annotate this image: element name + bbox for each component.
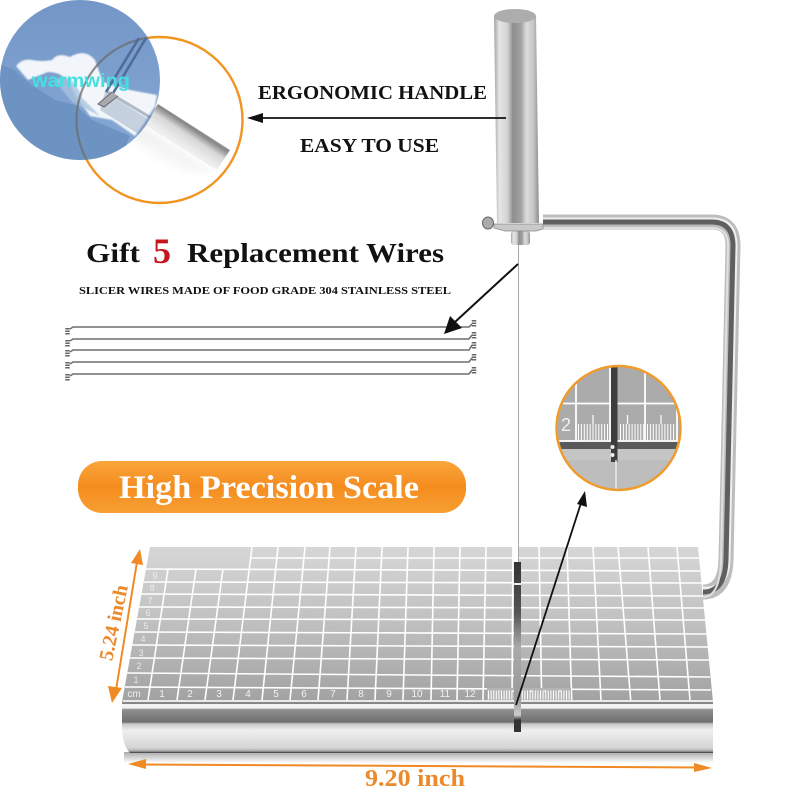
horizontal scale numbers: 6 [301,689,307,700]
text: easy to use: EASY TO USE [300,135,439,157]
horizontal scale numbers: 9 [386,689,392,700]
zoom circle: handle detail [76,37,242,203]
arrow: to handle [247,113,506,123]
horizontal scale numbers: 8 [358,689,364,700]
heading: gift replacement wires [86,231,444,271]
watermark text: warmwing [31,71,130,92]
heading: gift replacement wires: 5 [153,231,171,271]
vertical scale numbers: 5 [143,621,149,631]
horizontal scale numbers: 4 [245,689,251,700]
horizontal scale numbers: cm [127,689,141,700]
heading: gift replacement wires: Gift [86,238,140,268]
vertical scale numbers: 1 [133,675,139,685]
ruler ticks [487,688,571,700]
heading: ergonomic handle: ERGONOMIC HANDLE [258,82,487,104]
pill banner: high precision scale: High Precision Scale [119,470,419,506]
replacement wires [68,320,474,381]
board shadow [124,752,713,763]
heading: gift replacement wires: Replacement Wires [187,238,444,268]
vertical scale numbers: 9 [152,571,158,581]
board slot [512,530,521,732]
vertical scale numbers: 6 [145,608,151,618]
horizontal scale numbers: 1 [159,689,165,700]
horizontal scale numbers: 10 [411,689,423,700]
horizontal scale numbers: 5 [273,689,279,700]
arrow: to scale detail [516,491,587,705]
watermark: sky circle [0,0,160,160]
horizontal scale numbers: 3 [216,689,222,700]
collar and screw [482,217,543,245]
slicer frame arm [543,219,736,597]
horizontal scale numbers: 2 [187,689,193,700]
dimension label: 9.20 inch: 9.20 inch [365,766,465,792]
board front edge [122,703,713,753]
cutting wire [518,245,520,562]
horizontal scale numbers: 7 [330,689,336,700]
vertical scale numbers [133,571,158,685]
horizontal scale numbers: 11 [440,689,451,700]
horizontal scale numbers: 12 [464,689,476,700]
slicer handle [482,9,543,245]
dimension arrow: width [128,759,712,772]
pill banner: high precision scale [78,461,466,513]
vertical scale numbers: 2 [136,661,142,671]
dimension arrow: depth [108,549,143,703]
dimension label: 5.24 inch: 5.24 inch [95,583,133,663]
board top with grid [122,547,713,702]
vertical scale numbers: 3 [138,648,144,658]
vertical scale numbers: 4 [140,634,146,644]
arrow: to replacement wires [444,264,518,334]
scale digit: 2 [561,415,571,435]
vertical scale numbers: 8 [149,583,155,593]
text: wire material: SLICER WIRES MADE OF FOOD GRADE 304 STAINLESS STEEL [79,285,451,297]
horizontal scale numbers [127,689,476,700]
zoom circle: scale detail [555,364,682,492]
vertical scale numbers: 7 [147,596,153,606]
cutting board [122,530,713,763]
